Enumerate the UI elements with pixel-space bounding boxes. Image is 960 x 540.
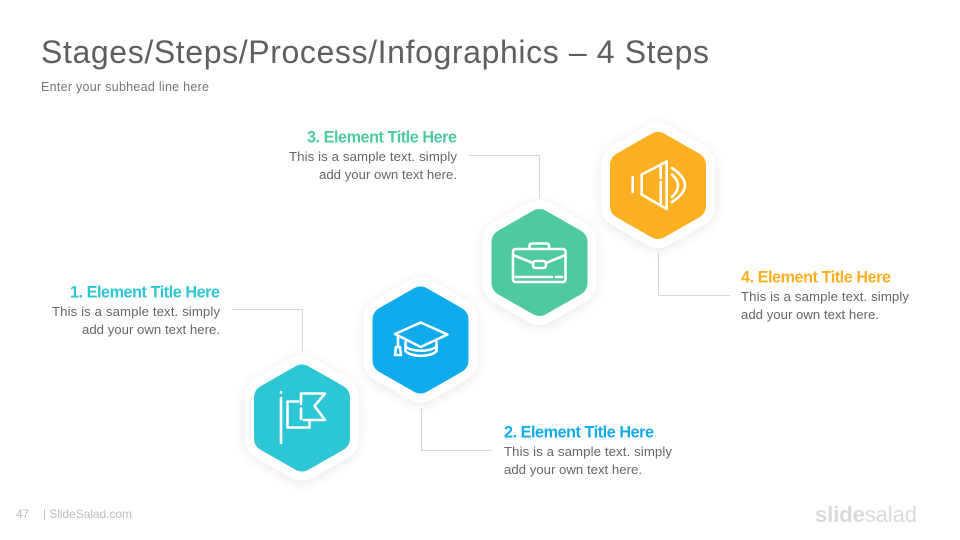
- text block 1: This is a sample text. simply: [52, 304, 220, 319]
- connector 3: [469, 156, 540, 198]
- text block 4: This is a sample text. simply: [741, 289, 909, 304]
- text block 4: add your own text here.: [741, 307, 879, 322]
- text block 3: This is a sample text. simply: [289, 149, 457, 164]
- step 3 hexagon with briefcase icon: [504, 222, 574, 303]
- text block 3: add your own text here.: [319, 167, 457, 182]
- step 4 hexagon with speaker icon: [623, 145, 693, 226]
- step 2 hexagon with graduation cap icon: [386, 300, 456, 380]
- text block 4: 4. Element Title Here: [741, 268, 891, 286]
- step 1 hexagon with flag icon: [267, 378, 337, 458]
- page number: 47: [16, 507, 29, 521]
- text block 1: add your own text here.: [82, 322, 220, 337]
- text block 3: 3. Element Title Here: [307, 128, 457, 146]
- text block 1: [52, 284, 220, 337]
- text block 4: [741, 268, 909, 322]
- text block 2: This is a sample text. simply: [504, 444, 672, 459]
- connector 2: [422, 408, 492, 450]
- connector 4: [658, 253, 730, 296]
- title: Stages/Steps/Process/Infographics – 4 Steps: [41, 34, 709, 70]
- logo: slidesalad: [815, 502, 917, 527]
- footer brand text: | SlideSalad.com: [43, 507, 132, 521]
- text block 1: 1. Element Title Here: [70, 284, 220, 302]
- connector 1: [232, 310, 302, 352]
- subhead: Enter your subhead line here: [41, 80, 209, 94]
- text block 2: [504, 424, 672, 477]
- text block 3: [289, 128, 457, 182]
- text block 2: 2. Element Title Here: [504, 424, 654, 442]
- text block 2: add your own text here.: [504, 462, 642, 477]
